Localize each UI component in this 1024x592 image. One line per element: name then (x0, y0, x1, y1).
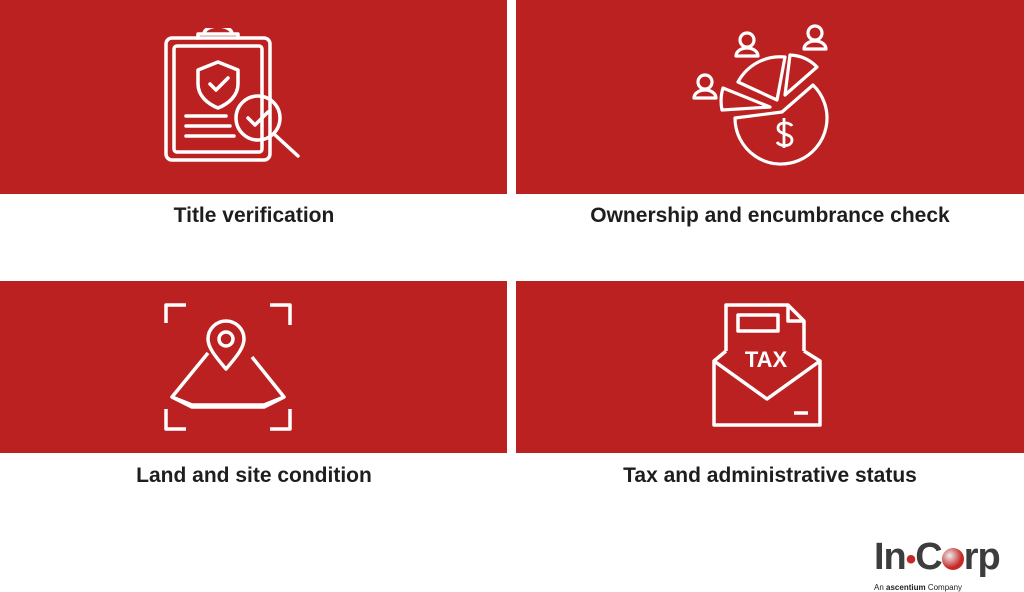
panel: ownership (516, 0, 1024, 194)
logo: In•C rp (874, 536, 1000, 578)
icon: land with pin (164, 303, 292, 431)
label: ownership: Ownership and encumbrance check (590, 204, 950, 227)
icon: pie chart with people (692, 24, 829, 166)
icon: tax envelope: TAX (745, 347, 788, 372)
label: tax: Tax and administrative status (623, 464, 917, 487)
label: title verification: Title verification (174, 204, 334, 227)
icon: clipboard with magnifier (164, 28, 300, 162)
panel: tax (516, 281, 1024, 453)
logo: An ascentium Company (874, 583, 962, 592)
label: land: Land and site condition (136, 464, 372, 487)
panel: land (0, 281, 507, 453)
icon: tax envelope (712, 303, 822, 427)
panel: title verification (0, 0, 507, 194)
